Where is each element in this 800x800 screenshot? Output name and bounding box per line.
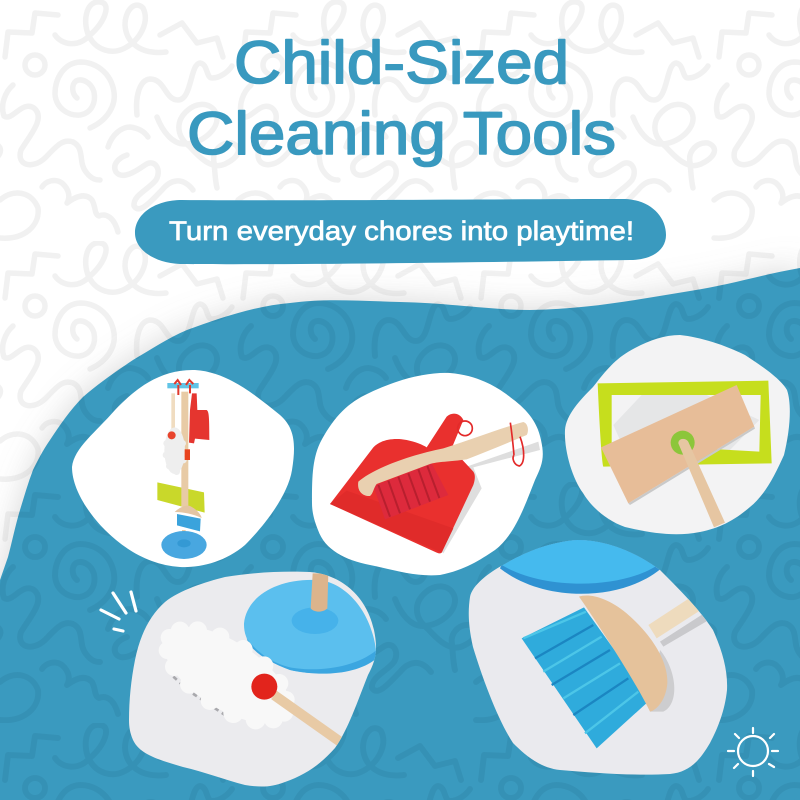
title: Child-Sized (234, 29, 569, 96)
icon: red cap (251, 674, 277, 700)
icon: dustpan shadow (440, 442, 540, 553)
icon: stand pole and handles (171, 392, 188, 543)
title: Cleaning Tools (187, 100, 616, 167)
photo blob: dustpan and brush (312, 373, 543, 575)
icon: brush bristles (373, 463, 448, 519)
photo blob: full cleaning stand (72, 370, 294, 567)
icon: wooden brush handle (358, 422, 528, 496)
photo blob: duster (129, 572, 377, 787)
wave shadow (0, 268, 800, 800)
icon: duster handle (274, 695, 343, 744)
icon: sun (728, 728, 778, 776)
icon: broom pole (648, 599, 706, 646)
icon: hanging broom head (175, 506, 202, 531)
icon: red dustpan (330, 414, 475, 553)
photo blob: flat mop (565, 335, 790, 534)
icon: blue bristles (522, 607, 650, 748)
icon: blue base disc (244, 573, 377, 674)
icon: wooden mop head (601, 385, 755, 505)
icon: white fluffy duster (159, 622, 294, 730)
icon: green mop pad (157, 482, 205, 513)
icon: green microfiber frame (598, 381, 772, 467)
icon: dustpan front lip (330, 491, 453, 553)
photo blob: broom head (469, 532, 727, 775)
title (187, 29, 616, 167)
icon: wooden broom head (579, 596, 667, 712)
subtitle pill: Turn everyday chores into playtime! (169, 216, 634, 246)
icon: hanging loop (458, 421, 472, 436)
icon: hanging duster (163, 427, 187, 475)
icon: hanging dustpan (189, 393, 209, 443)
icon: blue base disc (500, 540, 660, 594)
subtitle pill (135, 199, 666, 264)
blue wave panel (0, 268, 800, 800)
icon: red strap (510, 423, 524, 466)
icon: top rail with hooks (167, 380, 199, 395)
icon: sparkle lines (101, 592, 136, 631)
icon: grey mop plate (613, 395, 759, 453)
icon: duster underside shadow (172, 676, 224, 716)
icon: mop handle (678, 439, 725, 527)
icon: red clip (185, 449, 190, 460)
icon: round base (161, 531, 207, 559)
icon: green socket (671, 431, 695, 455)
icon: head shadow (650, 650, 674, 712)
